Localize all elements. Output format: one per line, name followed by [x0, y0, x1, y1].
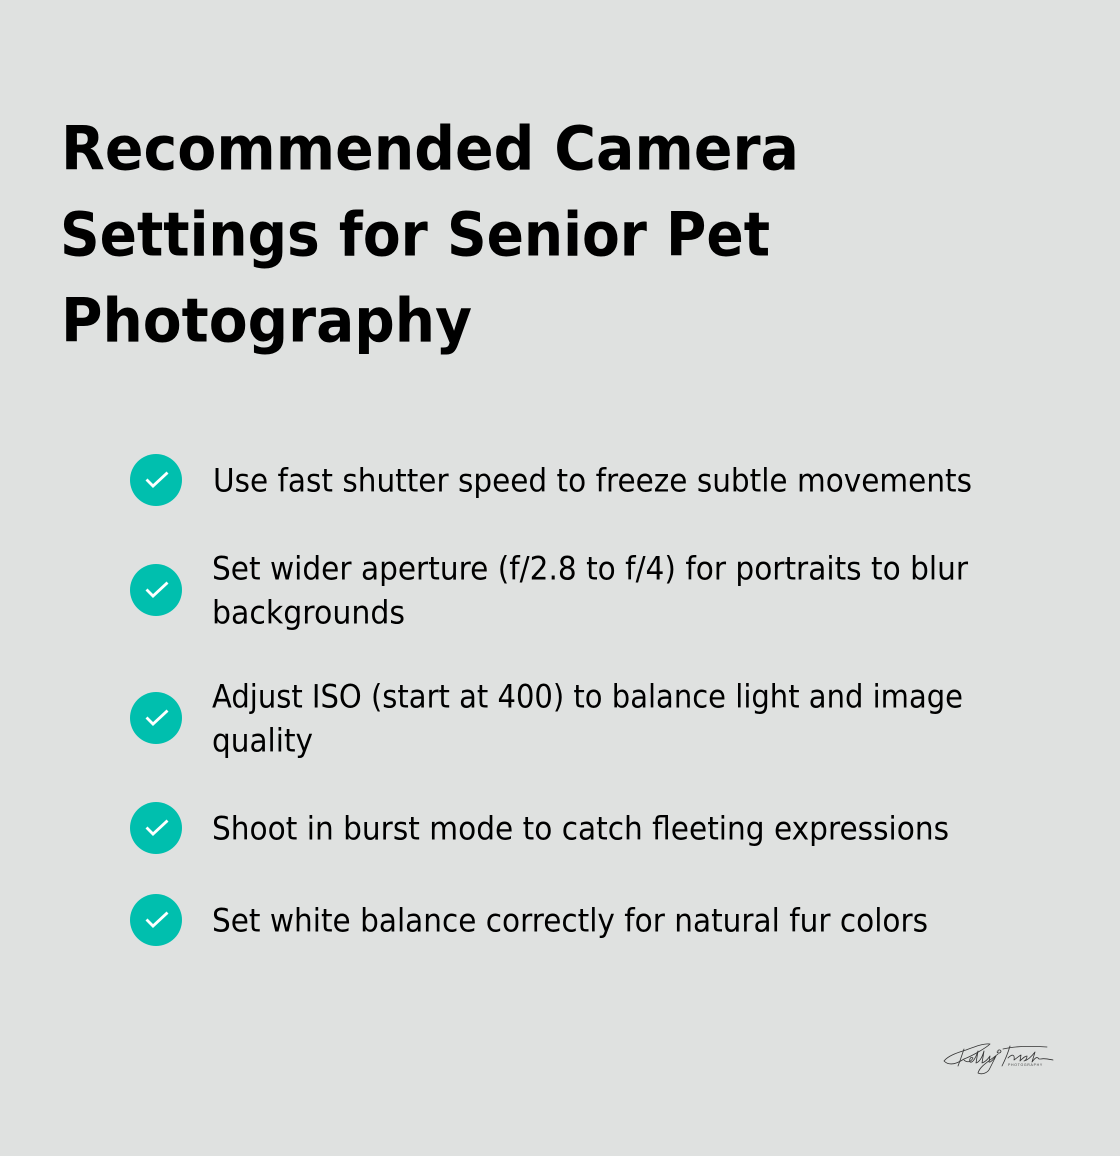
title: [60, 114, 799, 356]
item: white balance: Set white balance correctly for natural fur colors: [212, 902, 928, 940]
title: Recommended Camera: [61, 114, 799, 184]
item: burst mode: [130, 802, 949, 854]
item: wider aperture: Set wider aperture (f/2.8 to f/4) for portraits to blur: [212, 550, 969, 588]
checklist: [130, 454, 972, 946]
item: adjust ISO: quality: [212, 722, 313, 760]
title: Photography: [61, 286, 472, 356]
item: fast shutter speed: [130, 454, 972, 506]
item: burst mode: Shoot in burst mode to catch fleeting expressions: [212, 810, 949, 848]
item: wider aperture: [130, 550, 969, 632]
item: fast shutter speed: Use fast shutter speed to freeze subtle movements: [213, 462, 972, 500]
signature logo: PHOTOGRAPHY: [1008, 1063, 1043, 1067]
item: adjust ISO: Adjust ISO (start at 400) to balance light and image: [212, 678, 963, 716]
item: adjust ISO: [130, 678, 963, 760]
item: white balance: [130, 894, 928, 946]
signature logo: [944, 1044, 1053, 1074]
item: wider aperture: backgrounds: [212, 594, 405, 632]
title: Settings for Senior Pet: [60, 200, 770, 270]
